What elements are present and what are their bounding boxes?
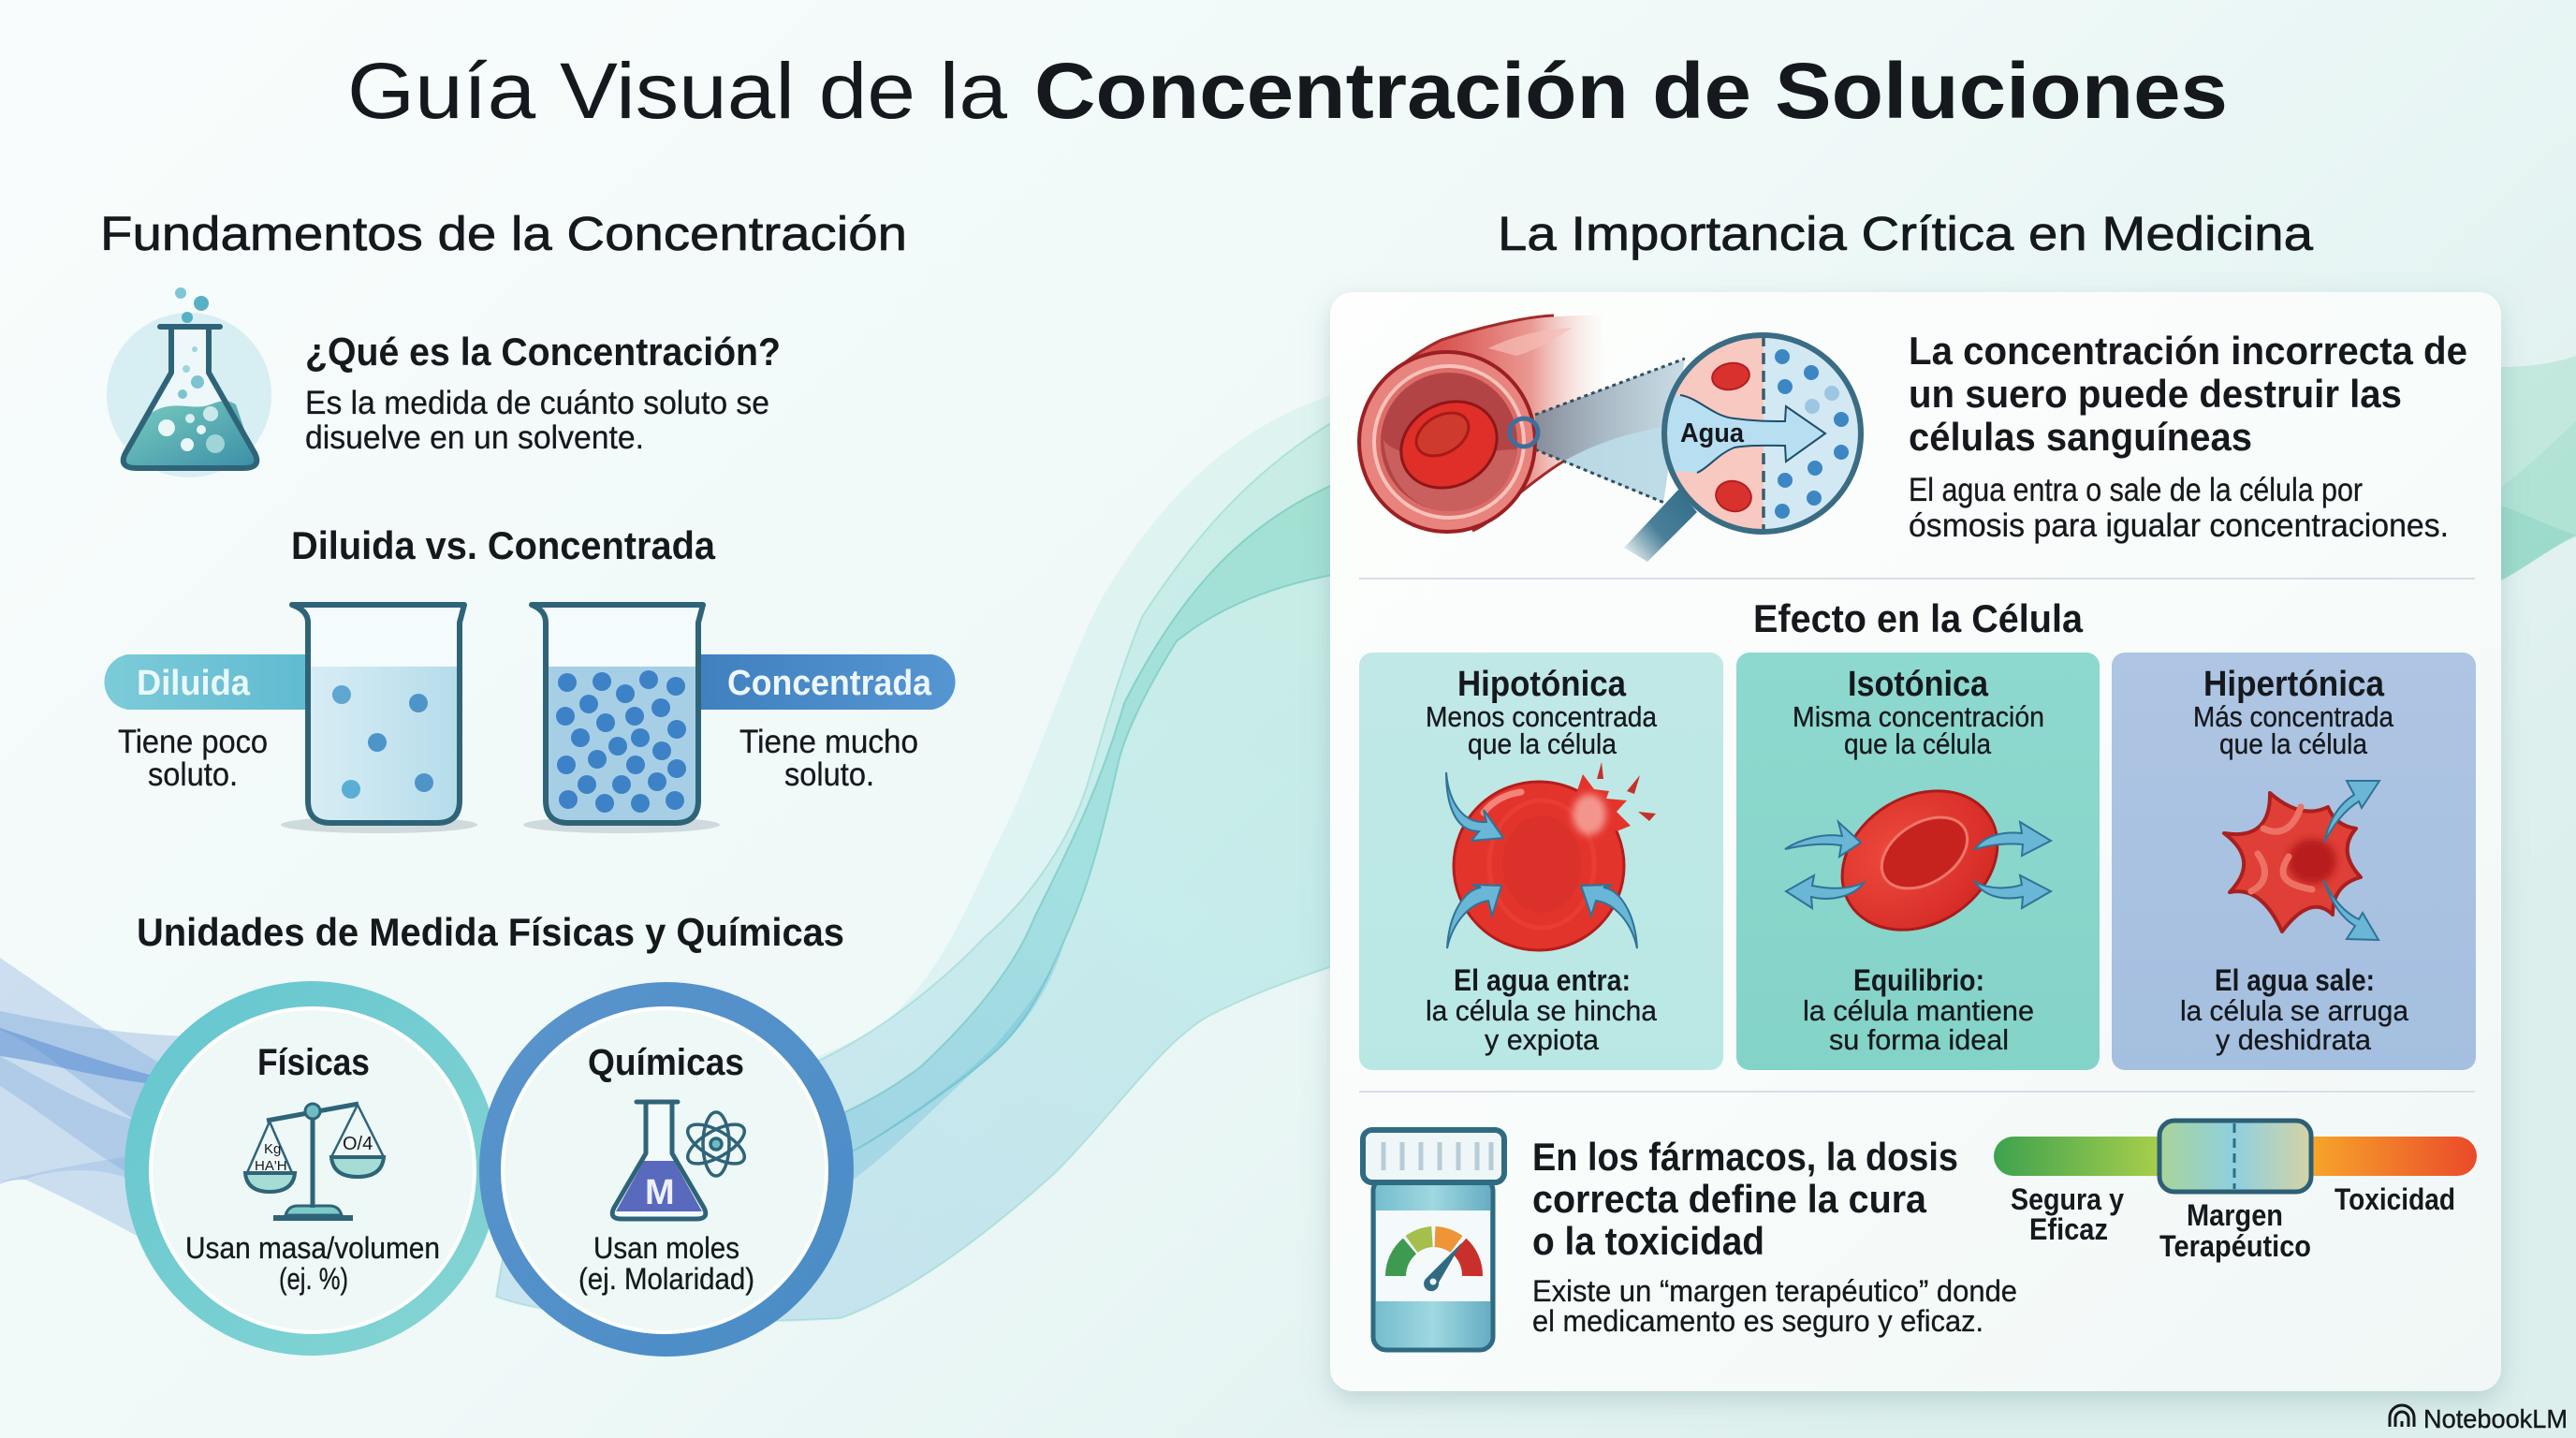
panel: medicina card	[1330, 292, 2501, 1391]
circle: físicas: Usan masa/volumen	[185, 1231, 440, 1265]
pale wave body rising to the right	[496, 393, 1339, 1321]
panel: hipotónica: El agua entra:	[1454, 963, 1631, 997]
title	[347, 47, 2228, 135]
panel: hipotónica: Menos concentrada	[1426, 700, 1658, 733]
blue left wave: upper fold	[0, 1011, 192, 1123]
chart: therapeutic margin bar: Eficaz	[2029, 1212, 2108, 1246]
heading: unidades de medida: Unidades de Medida Físicas y Químicas	[137, 910, 844, 954]
circle: químicas	[479, 982, 854, 1357]
label pill: diluida	[104, 654, 318, 710]
text: tiene poco soluto: soluto.	[148, 756, 238, 793]
text: dosis correcta: correcta define la cura	[1532, 1177, 1927, 1221]
panel: hipertónica: Hipertónica	[2203, 665, 2385, 704]
icon: balance scale	[245, 1104, 384, 1221]
circle: físicas: (ej. %)	[279, 1262, 348, 1296]
heading: efecto en la célula: Efecto en la Célula	[1753, 596, 2084, 640]
circle: físicas	[124, 981, 499, 1356]
circle: químicas: Químicas	[588, 1042, 744, 1083]
chart: therapeutic margin bar	[1994, 1121, 2477, 1263]
text: concentración incorrecta: ósmosis para igualar concentraciones.	[1909, 507, 2449, 544]
panel: hipertónica: El agua sale:	[2215, 963, 2375, 997]
right edge wave fold	[2501, 421, 2576, 580]
panel: hipotónica: la célula se hincha	[1426, 994, 1658, 1027]
label pill: concentrada: Concentrada	[727, 664, 932, 703]
panel: hipertónica: y deshidrata	[2216, 1023, 2372, 1056]
icon: medicine bottle with gauge	[1363, 1130, 1504, 1350]
title: Guía Visual de la	[347, 47, 1007, 135]
text: qué es la concentración: disuelve en un solvente.	[305, 419, 644, 456]
chart: therapeutic margin bar: Toxicidad	[2334, 1182, 2455, 1216]
panel: isotónica	[1736, 653, 2100, 1070]
panel: hipotónica: que la célula	[1468, 727, 1617, 760]
text: concentración incorrecta	[1909, 329, 2467, 544]
darker wave ribbon	[837, 482, 1339, 1154]
title: Concentración de Soluciones	[1034, 47, 2228, 135]
text: tiene mucho soluto: Tiene mucho	[739, 724, 918, 760]
text: concentración incorrecta: un suero puede destruir las	[1909, 372, 2402, 416]
panel: hipotónica: Hipotónica	[1457, 665, 1627, 704]
icon: blood vessel with magnifier: Agua	[1680, 418, 1745, 448]
text: tiene poco soluto: Tiene poco	[118, 724, 268, 760]
text: tiene poco soluto	[118, 724, 268, 793]
blue left wave: dark fold	[0, 1028, 150, 1083]
text: dosis correcta: Existe un “margen terapéutico” donde	[1532, 1274, 2017, 1308]
lower streak	[846, 936, 1066, 1181]
text: tiene mucho soluto	[739, 724, 918, 793]
panel: hipertónica: Más concentrada	[2193, 700, 2394, 733]
icon: balance scale: Kg	[264, 1141, 281, 1157]
heading: fundamentos: Fundamentos de la Concentración	[100, 207, 907, 260]
text: dosis correcta: el medicamento es seguro y eficaz.	[1532, 1304, 1983, 1338]
beaker: diluted	[281, 605, 477, 833]
second wave layer	[496, 418, 1339, 1321]
icon: flask with M: M	[645, 1173, 675, 1212]
panel: hipertónica	[2112, 653, 2476, 1070]
text: tiene mucho soluto: soluto.	[784, 756, 874, 793]
icon: shrunken cell	[2224, 781, 2379, 940]
panel: isotónica: Isotónica	[1848, 665, 1989, 704]
panel: hipertónica: que la célula	[2219, 727, 2368, 760]
icon: flask with bubbles	[107, 287, 271, 477]
heading: diluida vs concentrada: Diluida vs. Concentrada	[291, 523, 716, 567]
chart: therapeutic margin bar: Segura y	[2011, 1182, 2124, 1216]
background waves	[0, 356, 2576, 1321]
icon: blood vessel with magnifier	[1359, 315, 1861, 562]
panel: hipotónica: y expiota	[1485, 1023, 1600, 1056]
label pill: concentrada	[688, 654, 956, 710]
panel: isotónica: la célula mantiene	[1803, 994, 2034, 1027]
blue left wave: body	[0, 958, 159, 1238]
text: concentración incorrecta: El agua entra o sale de la célula por	[1909, 472, 2363, 508]
panel: hipertónica: la célula se arruga	[2180, 994, 2409, 1027]
text: dosis correcta: o la toxicidad	[1532, 1219, 1764, 1263]
chart: therapeutic margin bar: Terapéutico	[2159, 1229, 2311, 1263]
text: qué es la concentración: Es la medida de cuánto soluto se	[305, 385, 769, 421]
beaker: concentrated	[523, 605, 720, 833]
brand: notebooklm: NotebookLM	[2423, 1404, 2568, 1433]
icon: balance scale: O/4	[343, 1134, 373, 1154]
text: dosis correcta	[1532, 1135, 2017, 1338]
blue left wave: lower fold	[0, 1056, 136, 1175]
icon: swollen cell	[1446, 762, 1656, 950]
text: qué es la concentración	[305, 330, 781, 456]
circle: químicas: Usan moles	[593, 1231, 739, 1265]
icon: atom	[682, 1112, 750, 1176]
icon: flask with M	[612, 1102, 706, 1219]
blue left wave: bottom fold	[0, 1156, 131, 1181]
icon: normal cell	[1785, 763, 2051, 958]
circle: físicas: Físicas	[257, 1042, 370, 1083]
panel: hipotónica	[1359, 653, 1723, 1070]
text: dosis correcta: En los fármacos, la dosis	[1532, 1135, 1958, 1179]
right edge wave dark fold	[2501, 506, 2576, 580]
icon: balance scale: HA'H	[255, 1158, 287, 1174]
text: qué es la concentración: ¿Qué es la Concentración?	[305, 330, 781, 374]
label pill: diluida: Diluida	[137, 664, 251, 703]
right edge wave	[2501, 356, 2576, 580]
heading: medicina: La Importancia Crítica en Medicina	[1498, 207, 2314, 260]
panel: isotónica: su forma ideal	[1829, 1023, 2009, 1056]
panel: isotónica: Equilibrio:	[1853, 963, 1984, 997]
text: concentración incorrecta: células sanguíneas	[1909, 415, 2252, 459]
text: concentración incorrecta: La concentración incorrecta de	[1909, 329, 2467, 373]
circle: químicas: (ej. Molaridad)	[578, 1262, 754, 1296]
panel: isotónica: Misma concentración	[1793, 700, 2044, 733]
panel: isotónica: que la célula	[1844, 727, 1992, 760]
chart: therapeutic margin bar: Margen	[2187, 1198, 2283, 1232]
